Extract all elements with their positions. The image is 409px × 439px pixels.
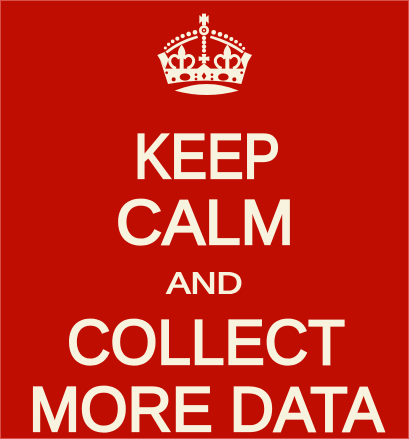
- text: AND: AND: [166, 266, 242, 300]
- icon: crown: [157, 14, 252, 95]
- orb: [199, 25, 209, 35]
- center cross: [199, 54, 209, 63]
- jewel cutouts: [165, 71, 243, 81]
- arches: [165, 36, 198, 53]
- left fleur: [178, 45, 185, 69]
- crown band: [160, 59, 249, 84]
- cross: [199, 14, 209, 25]
- central pearls: [202, 36, 206, 40]
- crown base: [175, 84, 239, 95]
- side points: [157, 52, 169, 68]
- text: KEEP: KEEP: [134, 122, 280, 192]
- text: COLLECT: COLLECT: [67, 308, 345, 378]
- pearls: [193, 30, 197, 35]
- text: CALM: CALM: [116, 188, 294, 258]
- right fleur: [224, 45, 231, 69]
